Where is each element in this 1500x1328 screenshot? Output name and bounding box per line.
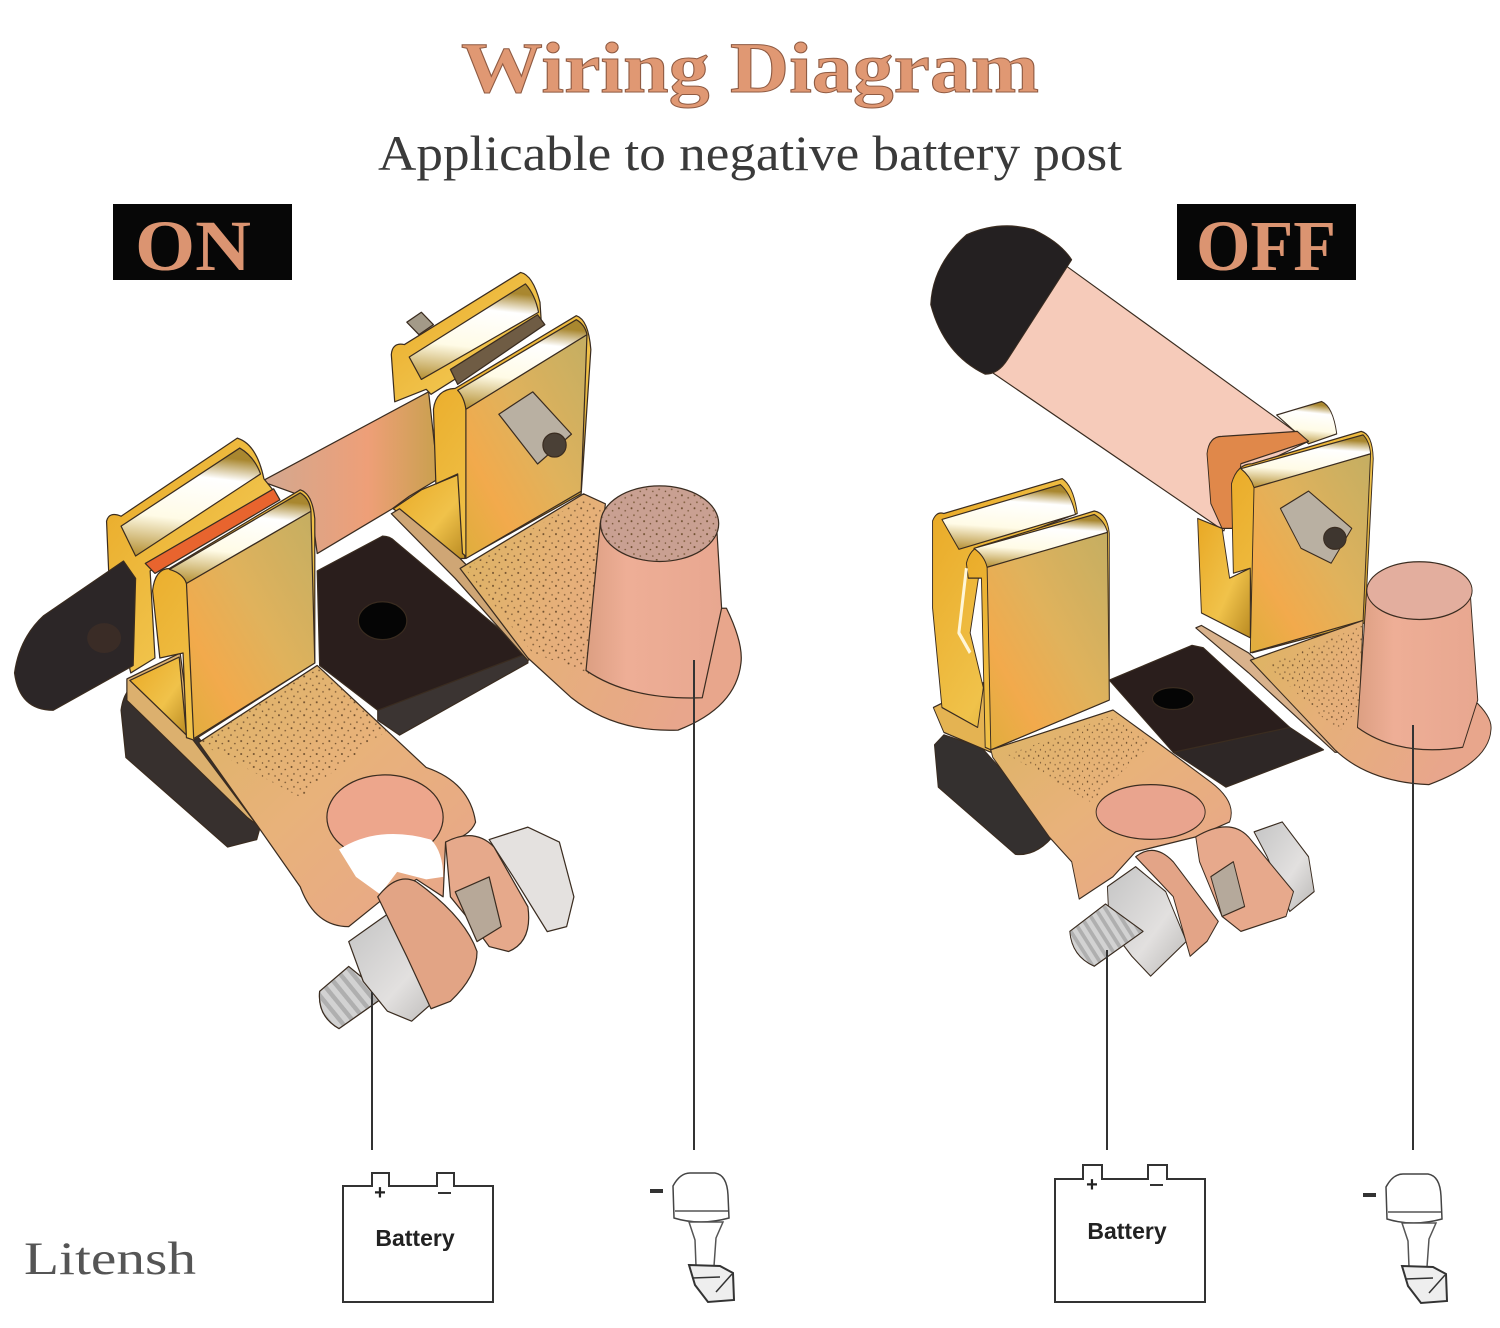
front left clip — [966, 511, 1109, 750]
ON label: ON — [135, 206, 251, 286]
front right clip base — [393, 474, 465, 558]
top rear screw — [407, 312, 433, 335]
rear right clip — [391, 272, 541, 402]
clamp ear front — [378, 879, 477, 1009]
lever blade — [985, 262, 1309, 531]
right terminal base strip — [1196, 625, 1357, 752]
bolt shaft — [455, 877, 501, 942]
mounting hole — [1153, 688, 1194, 709]
clamp ear front — [1136, 850, 1218, 956]
black base plate — [1109, 645, 1324, 787]
thread — [319, 966, 385, 1029]
coil between hinge clips — [450, 315, 545, 384]
rear left clip — [933, 479, 1077, 727]
right terminal lug — [460, 494, 741, 730]
screw — [1280, 491, 1352, 563]
subtitle: Applicable to negative battery post — [378, 125, 1122, 181]
switch in OFF position — [931, 226, 1491, 976]
right lug speckle — [465, 499, 601, 673]
battery OFF: + — [1086, 1174, 1098, 1196]
right nut — [1254, 822, 1314, 911]
battery ON: + — [374, 1182, 386, 1204]
outboard motor OFF — [1363, 1174, 1447, 1303]
copper post — [1357, 588, 1478, 750]
thread — [1070, 904, 1143, 966]
clip slot — [959, 568, 970, 653]
lug hole — [1096, 785, 1205, 839]
left terminal lug — [991, 710, 1231, 899]
battery OFF — [1055, 1165, 1205, 1302]
left clip gold base and edge strip — [933, 683, 991, 752]
clamp ear rear — [446, 836, 529, 952]
rear hinge curl — [1277, 402, 1337, 444]
screw — [499, 392, 571, 464]
lower rubber pad — [934, 735, 1057, 854]
mounting hole — [358, 602, 407, 640]
front nut — [349, 914, 446, 1021]
left terminal lug — [199, 665, 476, 927]
ON label — [113, 204, 292, 286]
rubber handle — [15, 561, 136, 710]
post top speckle — [602, 487, 718, 560]
copper post — [586, 521, 722, 698]
connector lines — [372, 660, 1413, 1150]
rubber handle — [931, 226, 1072, 374]
knife blade — [262, 392, 438, 554]
brand name: Litensh — [24, 1233, 196, 1285]
front left clip — [153, 490, 315, 740]
rear hinge clip — [1207, 431, 1309, 528]
right nut — [489, 827, 574, 932]
bolt shaft — [1211, 862, 1245, 916]
switch in ON position — [15, 272, 741, 1029]
lower rubber pad — [121, 688, 262, 847]
battery ON — [343, 1173, 493, 1302]
right terminal lug — [1250, 620, 1491, 785]
battery ON: Battery — [375, 1225, 455, 1251]
front hinge clip — [1231, 431, 1373, 653]
right lug speckle — [1267, 625, 1363, 732]
right terminal base strip — [391, 509, 547, 660]
left clip base strip — [127, 653, 257, 825]
hinge base — [1198, 518, 1250, 638]
left lug speckle — [1008, 715, 1151, 802]
post top — [601, 486, 719, 561]
handle highlight — [87, 623, 121, 653]
front nut — [1107, 867, 1186, 976]
OFF label: OFF — [1196, 206, 1336, 286]
post top — [1367, 562, 1472, 619]
lug hole opening — [339, 834, 443, 894]
black base plate — [317, 536, 528, 735]
rear left clip — [107, 438, 280, 673]
title: Wiring Diagram — [461, 28, 1039, 108]
left lug speckle — [199, 665, 387, 797]
clamp ear rear — [1196, 827, 1294, 931]
outboard motor ON — [650, 1173, 734, 1302]
battery OFF: Battery — [1087, 1218, 1167, 1244]
front right clip — [433, 316, 591, 558]
lug hole — [327, 775, 443, 859]
